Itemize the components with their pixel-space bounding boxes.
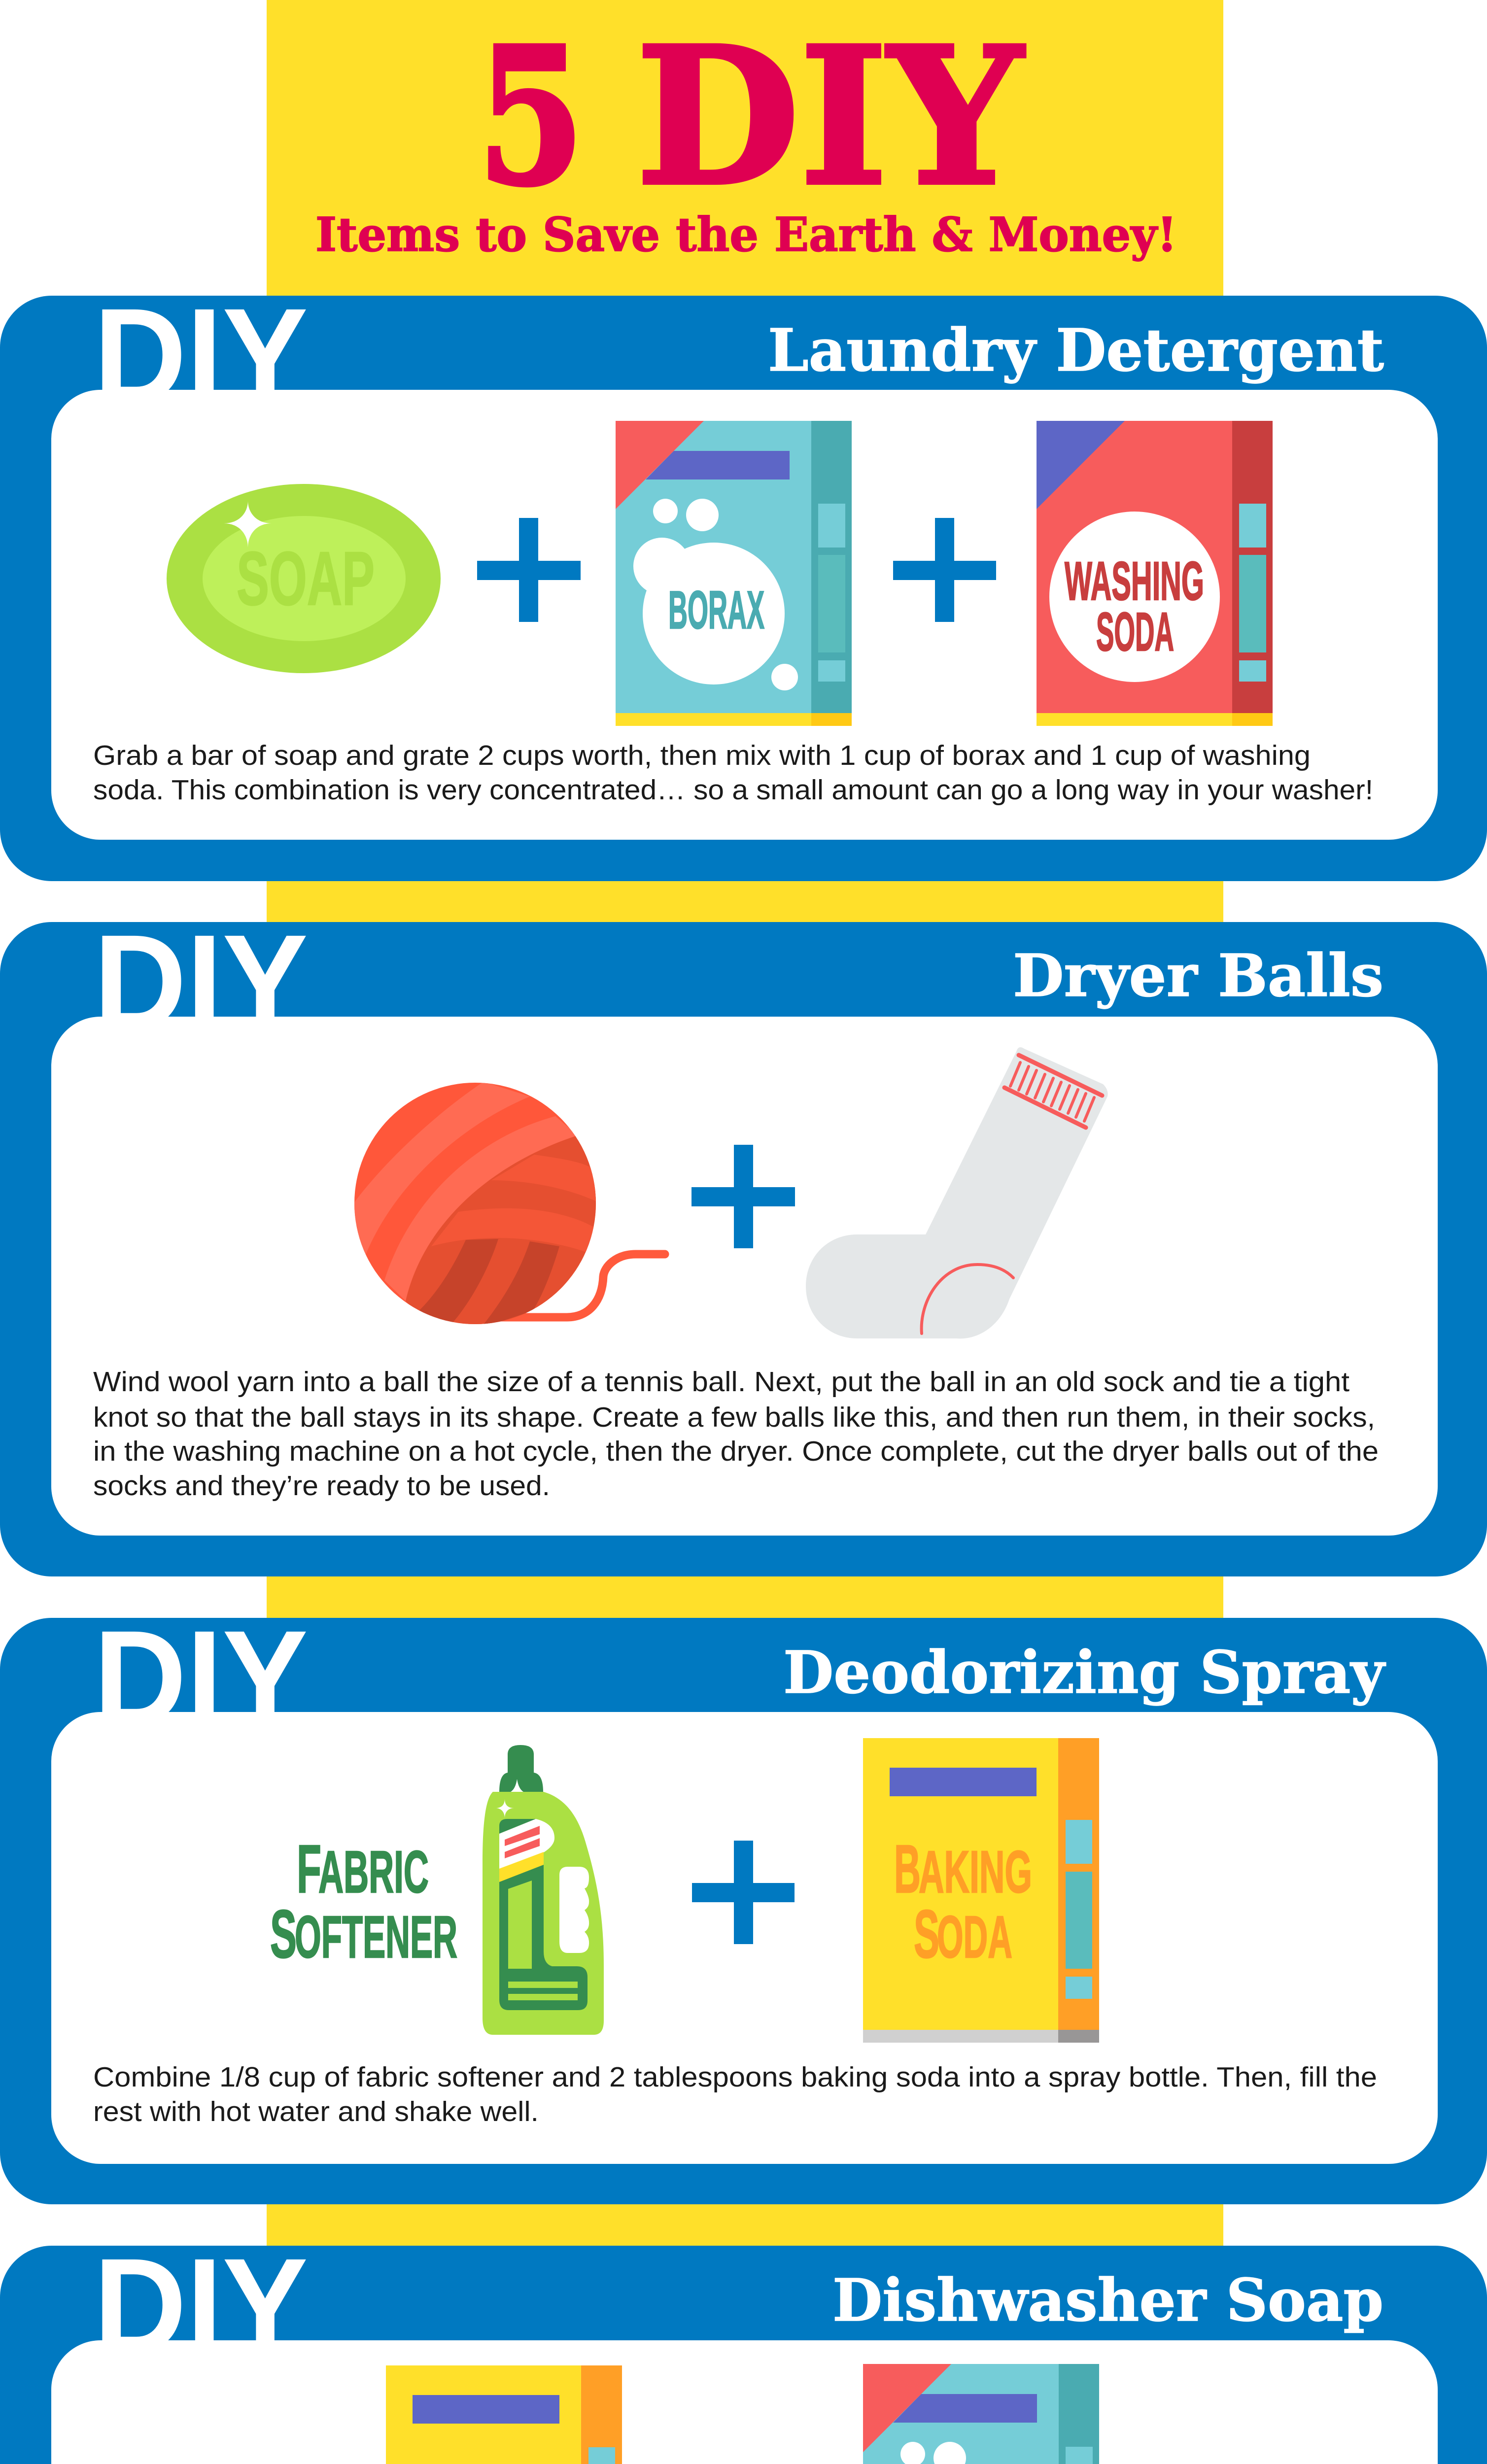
text block: dryer balls instructions: knot so that the ball stays in its shape. Create a few balls like this, and then run them, in their socks,	[93, 1402, 1375, 1433]
icon: washing soda box	[1037, 421, 1273, 726]
icon: baking soda box: S	[914, 1896, 939, 1972]
icon: plus	[893, 518, 996, 622]
text block: dryer balls instructions	[93, 1366, 1379, 1502]
icon: washing soda box: SODA	[1096, 602, 1174, 662]
text block: laundry instructions	[93, 740, 1373, 806]
icon: borax box	[863, 2364, 1099, 2464]
icon: sock	[806, 1047, 1108, 1338]
title: 5 DIY: DIY	[636, 6, 1027, 228]
title: 5 DIY: 5	[477, 6, 585, 228]
heading: laundry detergent: Laundry Detergent	[768, 316, 1384, 384]
icon: soap: SOAP	[237, 536, 375, 621]
label: fabric softener: F	[297, 1831, 321, 1907]
heading: deodorizing spray: Deodorizing Spray	[783, 1638, 1386, 1707]
yellow background band	[267, 0, 1223, 2464]
icon: baking soda box: B	[894, 1831, 921, 1907]
icon: washing soda box: WASHING	[1065, 551, 1204, 612]
label: fabric softener: OFTENER	[295, 1903, 457, 1970]
label: fabric softener: ABRIC	[318, 1838, 429, 1905]
icon: baking soda box: AKING	[919, 1838, 1032, 1905]
DIY label: DIY	[94, 907, 308, 1057]
label: fabric softener	[270, 1831, 457, 1972]
panel: deodorizing spray	[0, 1603, 1487, 2204]
subtitle: Items to Save the Earth & Money!	[315, 207, 1177, 262]
text block: spray instructions	[93, 2061, 1377, 2127]
icon: baking soda box	[863, 1738, 1099, 2043]
text block: dryer balls instructions: socks and they’re ready to be used.	[93, 1470, 550, 1502]
icon: baking soda box: ODA	[937, 1903, 1012, 1970]
panel: dryer balls	[0, 907, 1487, 1576]
white card	[51, 390, 1438, 840]
text block: dryer balls instructions: in the washing machine on a hot cycle, then the dryer. Once complete, cut the dryer balls out of the	[93, 1436, 1379, 1467]
DIY label: DIY	[94, 1603, 308, 1752]
text block: dryer balls instructions: Wind wool yarn into a ball the size of a tennis ball. Next, put the ball in an old sock and tie a tight	[93, 1366, 1349, 1398]
text block: laundry instructions: soda. This combination is very concentrated… so a small amount can go a long way in your washer!	[93, 774, 1373, 806]
label: fabric softener: S	[270, 1896, 297, 1972]
white card	[51, 2340, 1438, 2464]
icon: borax box	[616, 421, 852, 726]
icon: plus	[692, 1145, 795, 1248]
icon: soap	[167, 484, 441, 673]
text block: laundry instructions: Grab a bar of soap and grate 2 cups worth, then mix with 1 cup of borax and 1 cup of washing	[93, 740, 1311, 771]
DIY label: DIY	[94, 2230, 308, 2380]
icon: fabric softener bottle	[483, 1745, 604, 2035]
icon: plus	[477, 518, 581, 622]
heading: dishwasher soap: Dishwasher Soap	[832, 2266, 1383, 2334]
icon: borax box: BORAX	[668, 580, 764, 640]
white card	[51, 1017, 1438, 1536]
text block: spray instructions: rest with hot water and shake well.	[93, 2096, 539, 2127]
white card	[51, 1712, 1438, 2164]
icon: baking soda box	[386, 2365, 622, 2464]
DIY label: DIY	[94, 280, 308, 430]
text block: spray instructions: Combine 1/8 cup of fabric softener and 2 tablespoons baking soda into a spray bottle. Then, fill the	[93, 2061, 1377, 2093]
icon: plus	[692, 1841, 795, 1944]
panel: laundry detergent	[0, 280, 1487, 881]
panel: dishwasher soap	[0, 2230, 1487, 2464]
icon: yarn ball	[352, 1082, 665, 1331]
heading: dryer balls: Dryer Balls	[1013, 941, 1383, 1010]
